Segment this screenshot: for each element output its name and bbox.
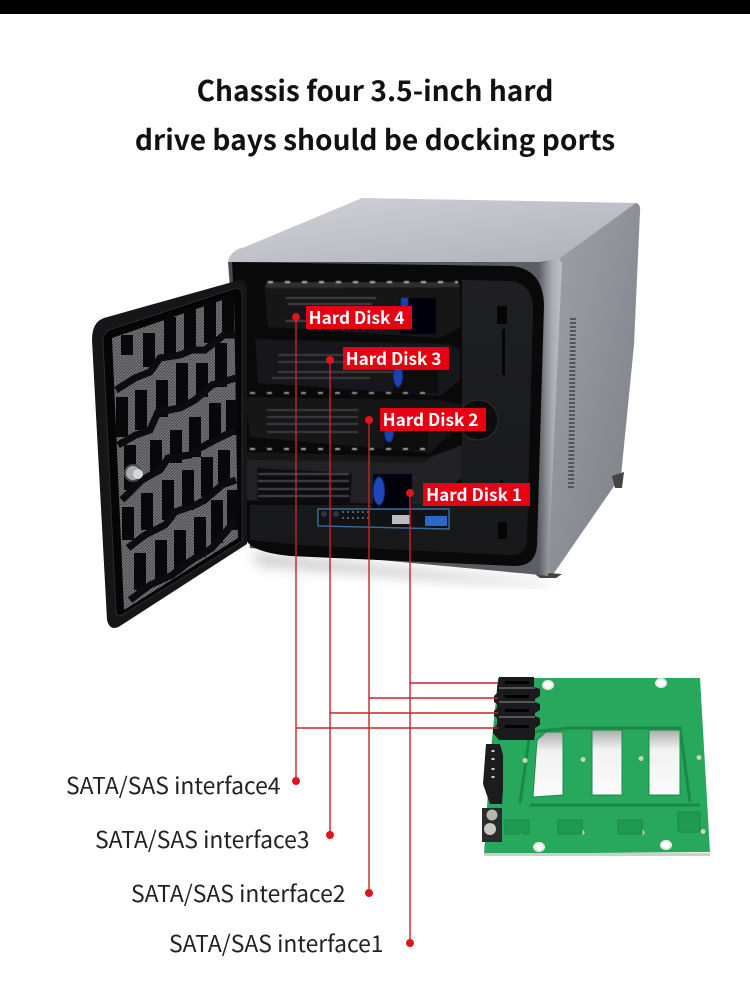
door frame: [92, 280, 247, 628]
label: hard disk 2: Hard Disk 2: [383, 406, 478, 431]
interface 2 label: SATA/SAS interface2: [131, 875, 346, 909]
interface 3 label: SATA/SAS interface3: [95, 821, 310, 855]
connection lines: [296, 317, 498, 943]
label: hard disk 3: Hard Disk 3: [346, 345, 441, 370]
door lock: [125, 465, 141, 481]
chassis side face: [548, 203, 640, 576]
honeycomb slots: [122, 295, 233, 590]
trace outline: [520, 728, 700, 805]
pad traces: [505, 812, 700, 834]
honeycomb ribs: [116, 335, 236, 600]
label: hard disk 4: Hard Disk 4: [309, 304, 404, 329]
board: [484, 678, 710, 854]
open door: [92, 280, 247, 628]
screws: [519, 755, 706, 835]
drive 1: [237, 445, 462, 510]
top black bar: [0, 0, 750, 14]
title: [135, 69, 615, 159]
interface 4 label: SATA/SAS interface4: [66, 767, 281, 801]
title: drive bays should be docking ports: [135, 118, 615, 159]
door mesh: [112, 296, 238, 610]
floor shadow: [250, 552, 556, 586]
mounting holes: [534, 679, 671, 851]
feet: [532, 472, 624, 578]
front io strip: [318, 509, 449, 529]
windows: [533, 732, 563, 797]
PCB adapter board: [482, 677, 710, 856]
power connector: [483, 744, 503, 804]
vent grille: [571, 318, 573, 490]
interface 1 label: SATA/SAS interface1: [169, 925, 384, 959]
storage chassis photo: [92, 198, 640, 628]
drive 3: [255, 339, 460, 396]
label: hard disk 1: Hard Disk 1: [426, 481, 522, 506]
dot markers: [292, 313, 414, 947]
title: Chassis four 3.5-inch hard: [197, 69, 553, 110]
drive 4: [264, 282, 460, 338]
capacitors: [482, 808, 502, 842]
sata connectors: [493, 677, 540, 740]
chassis top face: [228, 198, 636, 262]
front black panel: [232, 262, 544, 566]
right inner panel: [250, 280, 533, 555]
drive 2: [245, 393, 462, 453]
round button: [458, 400, 498, 440]
front bevel: [228, 260, 562, 576]
front slots: [497, 306, 507, 539]
